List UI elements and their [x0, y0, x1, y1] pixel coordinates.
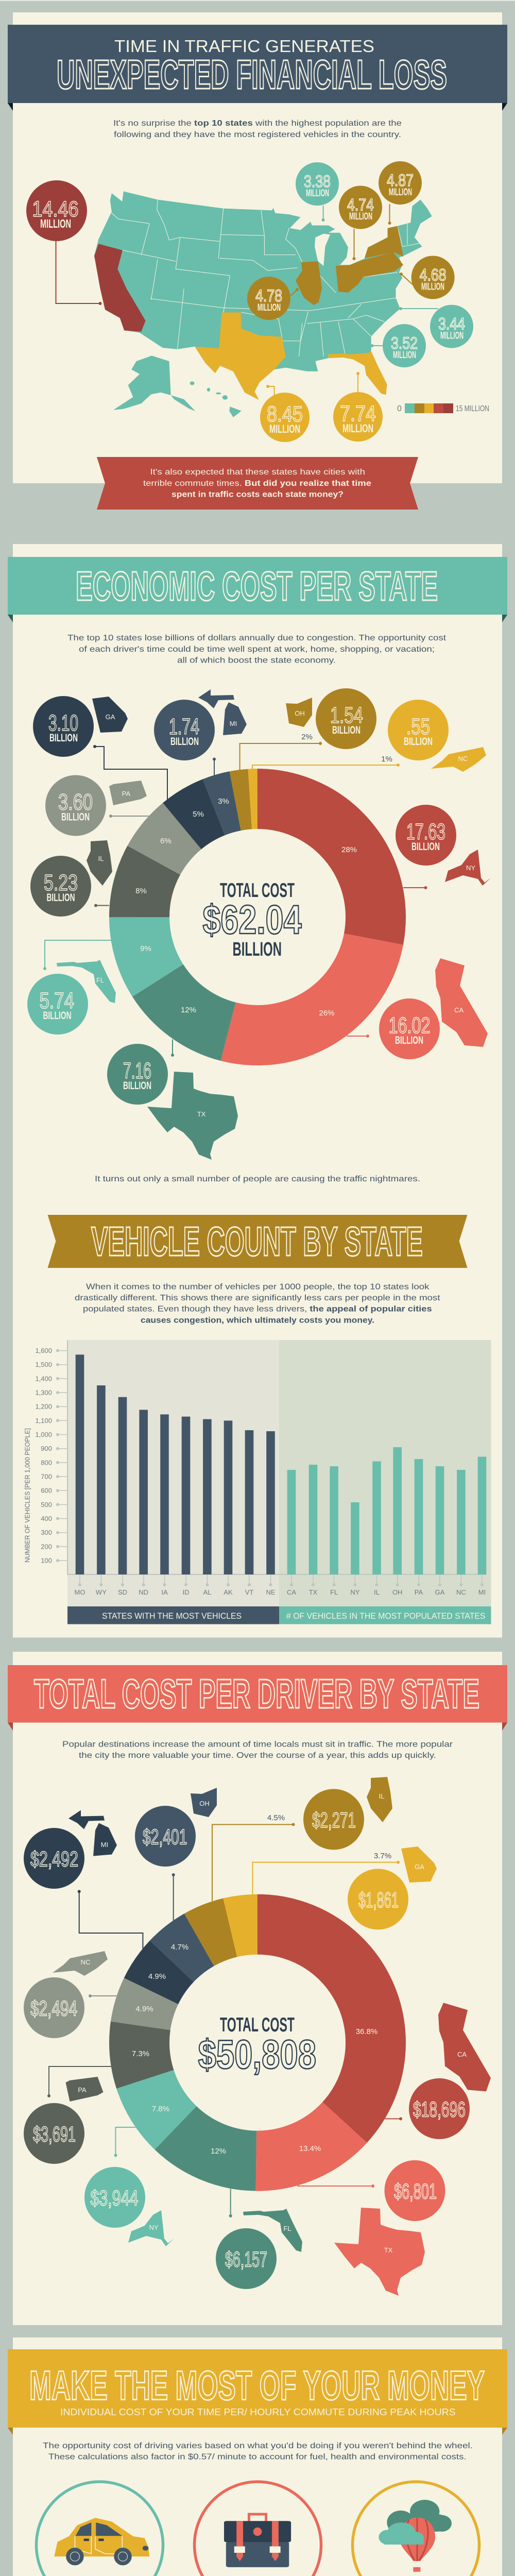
bubble: California 14.46 million — [26, 180, 87, 241]
callout ribbon: commute times: spent in traffic costs each state money? — [171, 490, 344, 499]
callout ribbon: commute times: terrible commute times. But did you realize that time — [143, 479, 371, 488]
x axis ticks and state labels: AK — [224, 1588, 233, 1596]
state: California $18,696: $18,696 — [413, 2097, 466, 2122]
state: Florida $6,157 — [216, 2209, 302, 2289]
state: Michigan 1.74 billion: BILLION — [170, 736, 199, 748]
item: business travel $25.19 — [190, 2482, 325, 2576]
state: Ohio $2,401: OH — [199, 1800, 210, 1807]
donut center total: BILLION — [233, 939, 282, 960]
US map — [94, 191, 432, 417]
x axis ticks and state labels: IA — [161, 1588, 168, 1596]
callout ribbon: commute times — [97, 457, 418, 510]
y axis ticks — [35, 1347, 67, 1564]
intro text: following and they have the most registered vehicles in the country. — [114, 130, 401, 139]
y axis ticks: 900 — [41, 1445, 52, 1452]
state: Ohio 1.54 billion — [286, 688, 376, 749]
state: Texas 7.16 billion: 7.16 — [123, 1058, 151, 1083]
y axis ticks: 1,500 — [35, 1361, 52, 1368]
state: North Carolina $2,494: NC — [81, 1958, 90, 1966]
icon: briefcase — [224, 2514, 291, 2567]
donut percent labels: 5% — [193, 810, 204, 819]
x axis ticks and state labels: TX — [309, 1588, 318, 1596]
x axis ticks and state labels: PA — [415, 1588, 423, 1596]
callout ribbon: commute times: It's also expected that these states have cities with — [150, 468, 365, 477]
state: Illinois $2,271: IL — [379, 1792, 384, 1800]
section 4 intro text: These calculations also factor in $0.57/ minute to account for fuel, health and environmental costs. — [48, 2452, 467, 2462]
state: New York $3,944: $3,944 — [90, 2185, 138, 2210]
state: Ohio 1.54 billion: BILLION — [332, 724, 360, 736]
x axis ticks and state labels — [75, 1574, 486, 1596]
vehicle count text — [75, 1283, 440, 1325]
y axis ticks: 1,200 — [35, 1403, 52, 1411]
bubble: Florida 7.74 million: MILLION — [342, 422, 373, 435]
state: Georgia $1,861: $1,861 — [358, 1888, 399, 1912]
bubble: Texas 8.45 million: 8.45 — [267, 402, 303, 427]
banner: section 1 title: TIME IN TRAFFIC GENERATES — [114, 37, 374, 56]
state: North Carolina $2,494: $2,494 — [30, 1996, 77, 2021]
x axis ticks and state labels: MI — [478, 1588, 486, 1596]
bubble: Florida 7.74 million — [333, 392, 383, 442]
state: North Carolina .55 billion: BILLION — [404, 736, 433, 748]
bubble: Ohio 4.74 million: 4.74 — [347, 196, 374, 214]
transition text: It turns out only a small number of people are causing the traffic nightmares. — [95, 1175, 420, 1183]
donut percent labels: 4.9% — [148, 1972, 166, 1981]
state: California $18,696 — [409, 2003, 491, 2139]
y axis ticks: 1,100 — [35, 1417, 52, 1425]
item: commuting $12.81 — [31, 2482, 167, 2576]
bubble: 3.44 million — [430, 305, 473, 348]
state: Pennsylvania 3.60 billion: BILLION — [61, 811, 90, 823]
section 4 panel: make the most of your money — [8, 2337, 507, 2576]
donut percent labels: 4.7% — [171, 1943, 188, 1952]
section 2 intro text — [67, 634, 447, 665]
state: Ohio 1.54 billion: 1.54 — [330, 703, 363, 728]
donut center total — [198, 2014, 316, 2077]
bubble: Illinois 4.78 million: MILLION — [258, 302, 281, 313]
donut center total: $50,808 — [198, 2031, 316, 2077]
donut percent labels — [135, 733, 392, 1018]
bubble: Michigan 3.38 million — [296, 162, 339, 206]
donut percent labels: 36.8% — [356, 2027, 377, 2036]
bubble: 3.52 million: 3.52 — [391, 334, 418, 352]
y axis title: NUMBER OF VEHICLES [PER 1,000 PEOPLE] — [24, 1428, 31, 1563]
bars: states with most vehicles — [76, 1354, 275, 1574]
state: Illinois 5.23 billion: IL — [98, 855, 104, 862]
section 4 intro text — [43, 2442, 473, 2462]
banner: section 3 title — [8, 1665, 507, 1731]
state: Georgia $1,861: GA — [415, 1863, 424, 1871]
state: New York $3,944: NY — [149, 2224, 159, 2231]
state: California 16.02 billion: BILLION — [395, 1035, 423, 1046]
donut percent labels: 3% — [218, 797, 229, 806]
donut percent labels: 8% — [135, 887, 147, 895]
icon: balloon and clouds — [379, 2500, 452, 2572]
section 3 panel: total cost per driver — [8, 1652, 507, 2325]
x axis ticks and state labels: FL — [330, 1588, 338, 1596]
section 2 intro text: all of which boost the state economy. — [177, 656, 336, 665]
state: New York 17.63 billion — [396, 805, 491, 886]
state: Georgia 3.10 billion: 3.10 — [48, 710, 78, 736]
donut percent labels: 3.7% — [374, 1852, 391, 1860]
state: New York 17.63 billion: 17.63 — [406, 819, 445, 844]
y axis ticks: 1,300 — [35, 1389, 52, 1396]
state: Florida 5.74 billion: FL — [96, 976, 104, 984]
bubble: New York 4.87 million: MILLION — [389, 187, 412, 198]
state: Michigan $2,492: $2,492 — [30, 1846, 78, 1871]
map legend — [397, 403, 489, 413]
x axis ticks and state labels: MO — [75, 1588, 85, 1596]
state: Texas 7.16 billion: BILLION — [123, 1080, 151, 1092]
donut percent labels — [132, 1814, 391, 2156]
x axis ticks and state labels: AL — [203, 1588, 211, 1596]
bubble: Michigan 3.38 million: MILLION — [306, 188, 329, 199]
vehicle count text: causes congestion, which ultimately costs you money. — [141, 1316, 374, 1325]
bars: most populated states — [287, 1447, 486, 1574]
state: Illinois 5.23 billion: 5.23 — [44, 870, 78, 895]
donut center total: TOTAL COST — [220, 2014, 295, 2036]
y axis ticks: 500 — [41, 1501, 52, 1509]
section 2 intro text: of each driver's time could be time well spent at work, home, shopping, or vacation; — [79, 645, 435, 654]
bubble: Texas 8.45 million: MILLION — [269, 422, 300, 435]
section 4 intro text: The opportunity cost of driving varies based on what you'd be doing if you weren't behind the wheel. — [43, 2442, 473, 2450]
x axis ticks and state labels: CA — [287, 1588, 296, 1596]
vehicle count text: When it comes to the number of vehicles per 1000 people, the top 10 states look — [86, 1283, 430, 1291]
state: Illinois 5.23 billion: BILLION — [46, 892, 75, 904]
state: California $18,696: CA — [457, 2050, 467, 2058]
state: Pennsylvania 3.60 billion — [45, 775, 147, 836]
state: Michigan 1.74 billion: MI — [230, 720, 237, 727]
bubble: Pennsylvania 4.68 million: MILLION — [421, 281, 444, 293]
bubble: Pennsylvania 4.68 million: 4.68 — [420, 266, 447, 284]
bubble: New York 4.87 million: 4.87 — [387, 171, 414, 190]
state: New York $3,944 — [84, 2167, 174, 2246]
map legend: 15 MILLION — [456, 404, 489, 413]
section 2 panel: economic cost per state — [8, 544, 507, 1637]
y axis ticks: 1,400 — [35, 1375, 52, 1382]
connector lines to donut — [47, 1823, 402, 2217]
x axis ticks and state labels: NC — [456, 1588, 466, 1596]
x axis ticks and state labels: GA — [435, 1588, 445, 1596]
state: California 16.02 billion: CA — [454, 1006, 464, 1014]
y axis ticks: 800 — [41, 1459, 52, 1466]
state: Illinois 5.23 billion — [30, 840, 112, 917]
donut percent labels: 28% — [341, 845, 357, 854]
x axis ticks and state labels: NE — [266, 1588, 276, 1596]
state: Pennsylvania 3.60 billion: PA — [122, 790, 131, 798]
state: Texas $6,801: TX — [384, 2246, 393, 2254]
banner: section 2 title — [8, 557, 507, 622]
x axis ticks and state labels: VT — [245, 1588, 253, 1596]
state: Florida $6,157: FL — [283, 2225, 291, 2232]
x axis ticks and state labels: IL — [374, 1588, 380, 1596]
bubble: Texas 8.45 million — [260, 393, 310, 442]
x axis ticks and state labels: WY — [96, 1588, 107, 1596]
bubble: California 14.46 million: MILLION — [40, 217, 71, 230]
state: Ohio $2,401: $2,401 — [143, 1825, 187, 1849]
bubble: Ohio 4.74 million — [339, 185, 382, 229]
state: California 16.02 billion — [379, 958, 488, 1059]
donut percent labels: 7.8% — [152, 2105, 169, 2113]
item: leisure and errands $9.51 — [348, 2482, 484, 2576]
state: Pennsylvania $3,691: PA — [78, 2086, 87, 2094]
donut percent labels: 7.3% — [132, 2049, 149, 2058]
bubble: Pennsylvania 4.68 million — [411, 256, 455, 299]
donut percent labels: 1% — [381, 755, 392, 764]
banner: section 4 title: INDIVIDUAL COST OF YOUR TIME PER/ HOURLY COMMUTE DURING PEAK HOURS — [60, 2407, 456, 2417]
y axis ticks: 400 — [41, 1515, 52, 1522]
bubble: Ohio 4.74 million: MILLION — [349, 211, 372, 222]
state: Michigan 1.74 billion: 1.74 — [169, 714, 199, 739]
state: Texas 7.16 billion: TX — [197, 1110, 206, 1118]
state: Ohio $2,401 — [135, 1788, 217, 1867]
x axis ticks and state labels: NY — [350, 1588, 360, 1596]
bubble: Florida 7.74 million: 7.74 — [340, 401, 376, 426]
state: Texas 7.16 billion — [107, 1044, 238, 1160]
section 3 intro text: the city the more valuable your time. Over the course of a year, this adds up quickly. — [79, 1751, 436, 1760]
bubble: 3.52 million: MILLION — [393, 350, 416, 361]
y axis ticks: 700 — [41, 1472, 52, 1481]
chart legend bars: # OF VEHICLES IN THE MOST POPULATED STATES — [286, 1612, 485, 1621]
state: North Carolina .55 billion: .55 — [406, 714, 430, 739]
state: Michigan $2,492: MI — [101, 1841, 108, 1849]
bubble: Illinois 4.78 million — [247, 277, 290, 320]
x axis ticks and state labels: SD — [118, 1588, 127, 1596]
bubble: 3.44 million: MILLION — [440, 331, 464, 342]
vehicle count text: populated states. Even though they have less drivers, the appeal of popular cities — [83, 1305, 432, 1314]
state: Texas $6,801 — [334, 2160, 445, 2296]
vehicle count text: drastically different. This shows there are significantly less cars per people in the most — [75, 1294, 440, 1302]
donut percent labels: 4.5% — [267, 1814, 285, 1822]
state: Georgia 3.10 billion: BILLION — [49, 732, 78, 744]
state: Florida 5.74 billion: 5.74 — [39, 988, 74, 1013]
state: Georgia 3.10 billion: GA — [106, 713, 115, 721]
y axis ticks: 200 — [41, 1543, 52, 1550]
state: Florida 5.74 billion — [27, 960, 116, 1035]
bubble: Illinois 4.78 million: 4.78 — [255, 286, 282, 305]
state: Ohio 1.54 billion: OH — [295, 709, 305, 717]
map callout connectors — [56, 204, 438, 395]
bubble: New York 4.87 million — [379, 161, 422, 205]
state: Texas $6,801: $6,801 — [394, 2179, 437, 2203]
x axis ticks and state labels: ID — [182, 1588, 190, 1596]
state: Illinois $2,271: $2,271 — [312, 1808, 356, 1832]
state: Florida 5.74 billion: BILLION — [43, 1010, 71, 1022]
bubble: California 14.46 million: 14.46 — [32, 197, 78, 222]
donut percent labels: 26% — [319, 1009, 335, 1018]
state: Georgia 3.10 billion — [33, 696, 128, 757]
donut center total: $62.04 — [203, 896, 302, 942]
map legend: 0 — [397, 404, 402, 413]
y axis ticks: 1,000 — [35, 1431, 52, 1438]
intro text: It's no surprise the top 10 states with the highest population are the — [113, 119, 402, 128]
y axis ticks: 100 — [41, 1557, 52, 1564]
bubble: Michigan 3.38 million: 3.38 — [304, 172, 331, 191]
x axis ticks and state labels: OH — [392, 1588, 402, 1596]
state: Pennsylvania 3.60 billion: 3.60 — [58, 789, 93, 815]
state: North Carolina .55 billion: NC — [458, 755, 468, 762]
donut percent labels: 6% — [160, 837, 171, 845]
section 1 panel: unexpected financial loss — [8, 12, 507, 483]
y axis ticks: 300 — [41, 1529, 52, 1536]
section 2 intro text: The top 10 states lose billions of dollars annually due to congestion. The opportunity cost — [67, 634, 447, 642]
y axis ticks: 600 — [41, 1487, 52, 1495]
chart legend bars: STATES WITH THE MOST VEHICLES — [102, 1612, 242, 1621]
donut chart: cost per driver — [139, 1924, 376, 2161]
banner: section 1 title — [8, 25, 507, 111]
donut percent labels: 4.9% — [135, 2005, 153, 2013]
donut percent labels: 12% — [211, 2147, 226, 2156]
state: Illinois $2,271 — [303, 1777, 392, 1850]
connector lines to donut — [43, 742, 427, 1057]
state: New York 17.63 billion: NY — [466, 864, 475, 872]
state: Michigan $2,492 — [24, 1810, 117, 1889]
bubble: 3.52 million — [383, 324, 426, 367]
donut center total: TOTAL COST — [220, 879, 295, 902]
state: North Carolina .55 billion — [388, 700, 486, 772]
donut center total — [203, 879, 302, 960]
donut percent labels: 13.4% — [299, 2144, 321, 2153]
donut percent labels: 9% — [140, 944, 151, 953]
donut percent labels: 12% — [181, 1006, 196, 1014]
icon: yellow car — [54, 2518, 149, 2565]
state: Georgia $1,861 — [348, 1846, 437, 1929]
state: Florida $6,157: $6,157 — [225, 2247, 267, 2271]
state: California 16.02 billion: 16.02 — [388, 1013, 431, 1038]
state: Pennsylvania $3,691: $3,691 — [33, 2122, 76, 2146]
donut percent labels: 2% — [301, 733, 313, 741]
state: Pennsylvania $3,691 — [24, 2077, 103, 2164]
chart legend bars — [67, 1606, 491, 1624]
intro text — [113, 119, 402, 139]
section 3 intro text — [62, 1740, 453, 1760]
bar chart: vehicles per 1000 people — [24, 1340, 491, 1624]
state: North Carolina $2,494 — [24, 1951, 108, 2038]
y axis ticks: 1,600 — [35, 1347, 52, 1354]
state: Michigan 1.74 billion — [154, 689, 247, 760]
bubble: 3.44 million: 3.44 — [438, 315, 465, 333]
x axis ticks and state labels: ND — [139, 1588, 148, 1596]
banner: section 4 title — [8, 2349, 507, 2435]
section 3 intro text: Popular destinations increase the amount of time locals must sit in traffic. The more popular — [62, 1740, 453, 1749]
donut chart: economic cost — [139, 799, 376, 1036]
state: New York 17.63 billion: BILLION — [411, 841, 440, 853]
